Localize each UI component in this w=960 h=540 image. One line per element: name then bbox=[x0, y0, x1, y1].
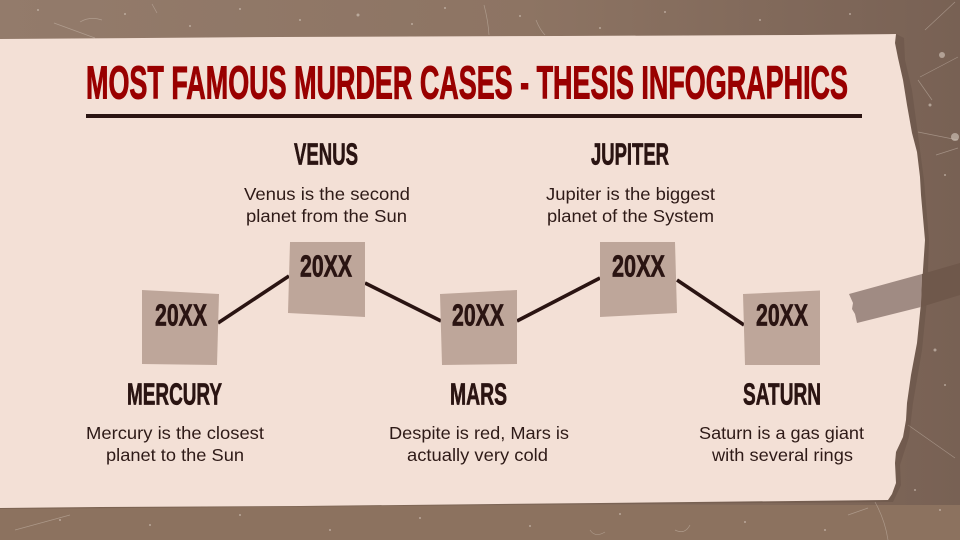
year box: Mars: 20XX bbox=[452, 298, 504, 332]
heading: Saturn: SATURN bbox=[743, 376, 821, 412]
year box: Saturn: 20XX bbox=[756, 298, 808, 332]
milestone: Venus bbox=[244, 136, 410, 317]
description: Venus: planet from the Sun bbox=[246, 206, 407, 226]
timeline connectors bbox=[218, 276, 744, 325]
milestone: Mars bbox=[389, 290, 569, 465]
description: Venus: Venus is the second bbox=[244, 184, 410, 204]
year box: Venus: 20XX bbox=[300, 248, 352, 284]
title rule bbox=[86, 114, 862, 118]
year box: Mars bbox=[440, 290, 517, 365]
year box: Mercury bbox=[142, 290, 219, 365]
year box: Jupiter bbox=[600, 242, 677, 317]
milestone: Saturn bbox=[699, 290, 864, 465]
description: Mercury: planet to the Sun bbox=[106, 445, 244, 465]
milestone: Jupiter bbox=[546, 136, 715, 317]
year box: Venus bbox=[288, 242, 365, 317]
heading: Venus: VENUS bbox=[294, 136, 358, 172]
description: Jupiter: planet of the System bbox=[547, 206, 714, 226]
year box: Mercury: 20XX bbox=[155, 298, 207, 332]
heading: Mars: MARS bbox=[450, 376, 507, 412]
description: Saturn: Saturn is a gas giant bbox=[699, 423, 864, 443]
description: Mars: actually very cold bbox=[407, 445, 548, 465]
description: Jupiter: Jupiter is the biggest bbox=[546, 184, 715, 204]
milestone: Mercury bbox=[86, 290, 264, 465]
year box: Saturn bbox=[743, 290, 820, 365]
heading: Mercury: MERCURY bbox=[127, 376, 222, 412]
tape strip bbox=[849, 263, 960, 323]
description: Mercury: Mercury is the closest bbox=[86, 423, 264, 443]
year box: Jupiter: 20XX bbox=[612, 248, 665, 284]
heading: Jupiter: JUPITER bbox=[591, 136, 669, 172]
description: Mars: Despite is red, Mars is bbox=[389, 423, 569, 443]
description: Saturn: with several rings bbox=[711, 445, 853, 465]
